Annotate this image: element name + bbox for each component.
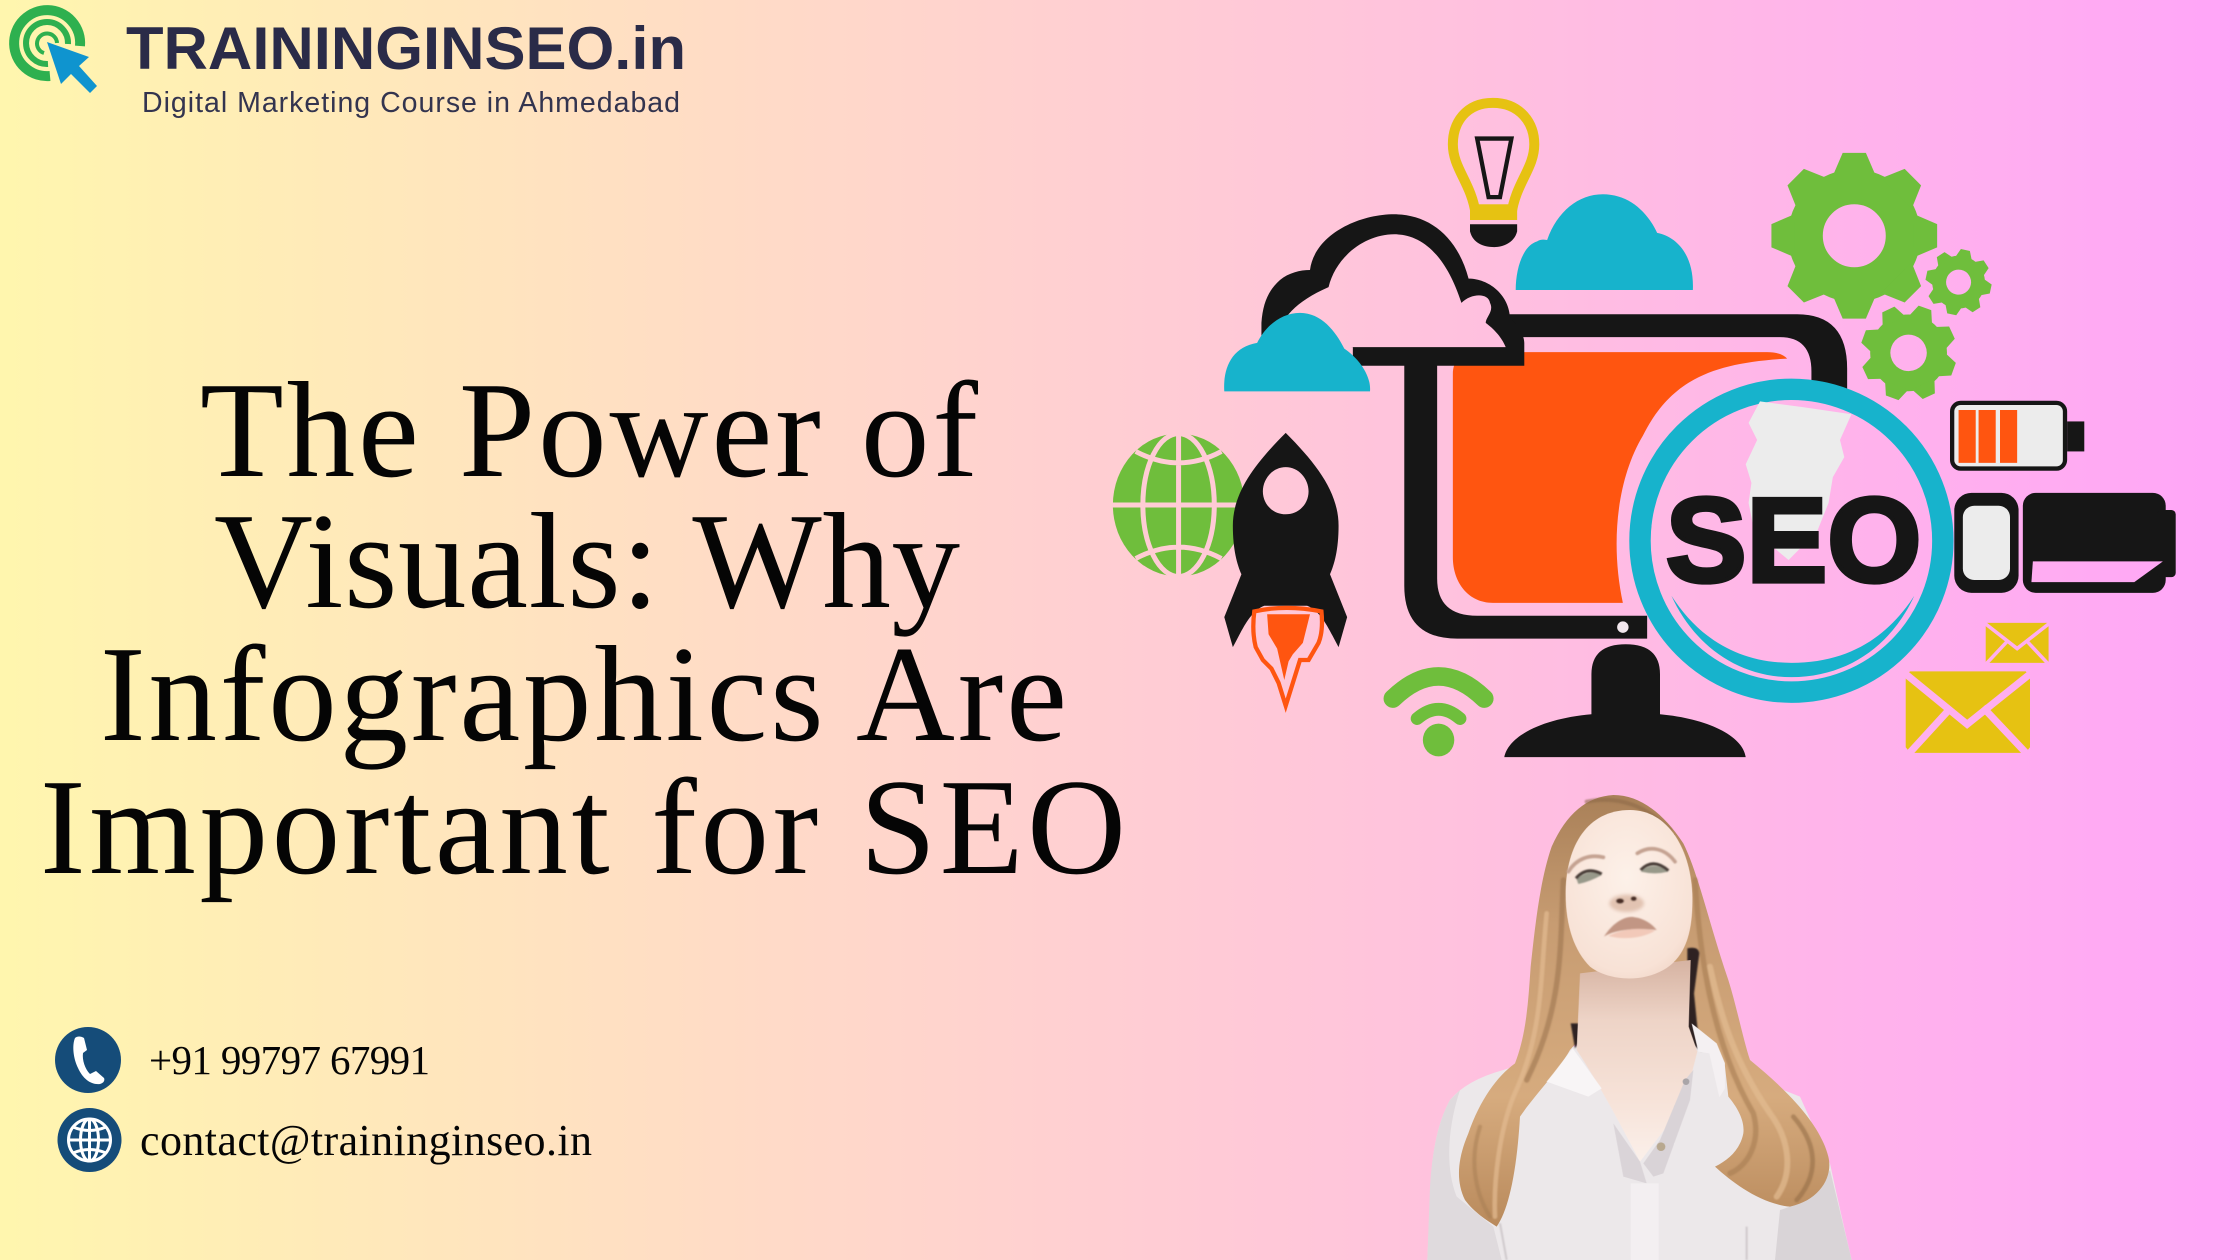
phone number: +91 99797 67991 <box>149 1037 430 1083</box>
icon: gear large <box>1771 153 1937 319</box>
icon: rocket <box>1224 433 1347 647</box>
monitor stand <box>1504 644 1746 757</box>
icon: rocket flame <box>1253 608 1322 706</box>
email address: contact@traininginseo.in <box>140 1116 592 1165</box>
title: The Power of <box>200 354 978 506</box>
icon: globe <box>1111 433 1246 577</box>
icon: phone <box>55 1027 121 1093</box>
tagline: Digital Marketing Course in Ahmedabad <box>142 87 680 119</box>
neck <box>1577 960 1697 1162</box>
icon: target with cursor <box>14 10 97 93</box>
shirt collar and placket <box>1547 1023 1725 1260</box>
icon: light bulb <box>1453 103 1534 247</box>
icon: small envelope <box>1984 623 2050 664</box>
title <box>40 354 1126 903</box>
logo: trainingINSEO brand <box>14 10 686 119</box>
shirt <box>1427 1025 1852 1260</box>
icon: blue cloud left <box>1224 313 1370 391</box>
title: Infographics Are <box>100 618 1067 770</box>
hair strands <box>1474 800 1813 1217</box>
magnifier handle <box>1954 493 2176 593</box>
icon: globe <box>58 1108 122 1172</box>
icon: outline cloud <box>1261 214 1524 366</box>
SEO illustration <box>1111 103 2176 757</box>
hair <box>1459 795 1829 1227</box>
icon: gear medium <box>1847 292 1970 414</box>
monitor screen <box>1453 352 1787 603</box>
contact details <box>55 1027 592 1172</box>
icon: battery <box>1952 403 2084 469</box>
icon: large envelope <box>1904 671 2031 757</box>
icon: gear small <box>1920 243 1998 321</box>
face <box>1566 810 1692 978</box>
icon: blue cloud right <box>1516 194 1693 290</box>
icon: magnifying glass with SEO <box>1640 389 1943 692</box>
title: Visuals: Why <box>214 485 960 637</box>
icon: wifi <box>1393 676 1484 756</box>
SEO lettering: SEO <box>1666 473 1921 607</box>
hair shadow behind neck <box>1571 948 1702 1052</box>
monitor frame <box>1404 314 1847 639</box>
woman looking up <box>1427 795 1852 1260</box>
brand name: TRAININGINSEO.in <box>126 15 686 82</box>
title: Important for SEO <box>40 751 1126 903</box>
